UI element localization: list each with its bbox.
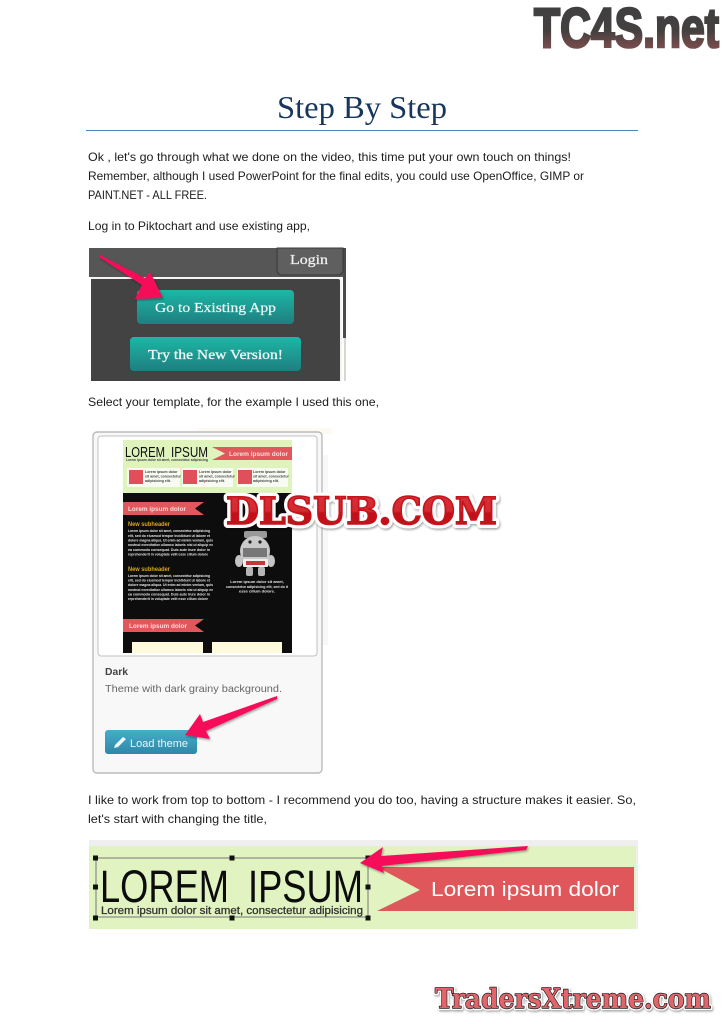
template thumbnail: Lorem ipsum dolor sit amet, consectetur adipisicing <box>128 528 210 533</box>
selected title text box <box>93 856 370 920</box>
template thumbnail: Lorem ipsum dolor sit amet, consectetur adipisicing <box>126 458 208 462</box>
template thumbnail: Lorem ipsum dolor sit amet, <box>230 579 284 584</box>
template thumbnail: esse cillum dolore. <box>239 588 275 594</box>
button: Go to Existing App: Go to Existing App <box>155 300 276 315</box>
template thumbnail: elit, sed do eiusmod tempor incididunt ut labore et <box>128 578 211 582</box>
title: Step By Step <box>277 89 447 125</box>
selected title text box: LOREM <box>100 861 229 912</box>
template thumbnail: ea commodo consequat. Duis aute irure dolor in <box>128 547 210 552</box>
template thumbnail: IPSUM <box>171 444 208 461</box>
selected title text box: IPSUM <box>248 861 363 912</box>
text: theme name: Dark <box>105 667 128 678</box>
template thumbnail: sit amet, consectetur <box>199 474 236 478</box>
text: top to bottom advice: let's start with changing the title, <box>88 812 267 826</box>
arrow: pink to load theme <box>185 696 277 739</box>
template thumbnail: elit, sed do eiusmod tempor incididunt ut labore et <box>128 533 211 538</box>
template thumbnail: sit amet, consectetur <box>145 474 182 478</box>
watermark: DLSUB.COM: DLSUB.COM <box>226 489 497 533</box>
template thumbnail: nostrud exercitation ullamco laboris nisi ut aliquip ex <box>128 587 214 592</box>
template thumbnail: adipisicing elit. <box>199 479 225 483</box>
template thumbnail: New subheader <box>128 566 170 573</box>
template thumbnail: nostrud exercitation ullamco laboris nisi ut aliquip ex <box>128 542 214 547</box>
button: Go to Existing App <box>137 290 294 324</box>
template thumbnail: LOREM <box>125 444 165 461</box>
text: log in instruction: Log in to Piktochart and use existing app, <box>88 219 310 233</box>
ribbon: Lorem ipsum dolor: Lorem ipsum dolor <box>431 879 619 901</box>
screenshot: Piktochart login panel: Login <box>290 252 328 267</box>
selected title text box: Lorem ipsum dolor sit amet, consectetur adipisicing <box>101 905 363 917</box>
watermark: DLSUB.COM: DLSUB.COM <box>226 489 497 533</box>
template thumbnail: adipisicing elit. <box>145 479 171 483</box>
template thumbnail: ea commodo consequat. Duis aute irure dolor in <box>128 592 210 596</box>
screenshot: title editing banner <box>89 840 638 929</box>
template thumbnail: Lorem ipsum dolor <box>199 470 232 474</box>
template thumbnail: Lorem ipsum dolor <box>145 470 178 474</box>
template thumbnail: Lorem ipsum dolor <box>129 623 187 630</box>
intro text block: Remember, although I used PowerPoint for the final edits, you could use OpenOffice, GIMP or <box>88 169 584 183</box>
template thumbnail: Lorem ipsum dolor <box>253 470 286 474</box>
text: theme description: Theme with dark grainy background. <box>105 683 282 695</box>
template thumbnail: reprehenderit in voluptate velit esse cillum dolore <box>128 552 209 556</box>
template thumbnail: Lorem ipsum dolor <box>128 506 186 513</box>
template thumbnail: dolore magna aliqua. Ut enim ad minim veniam, quis <box>128 538 214 542</box>
text: select template: Select your template, for the example I used this one, <box>88 395 379 409</box>
template thumbnail: adipisicing elit. <box>253 479 279 483</box>
template thumbnail: New subheader <box>128 521 170 528</box>
ribbon: Lorem ipsum dolor <box>377 867 634 911</box>
text: top to bottom advice <box>88 793 636 826</box>
button: Try the New Version: Try the New Version! <box>148 347 283 362</box>
template thumbnail: Lorem ipsum dolor sit amet, consectetur adipisicing <box>128 573 210 578</box>
screenshot: Piktochart login panel <box>89 248 346 381</box>
button: load theme: Load theme <box>130 738 188 750</box>
arrow: pink to existing app <box>99 255 163 299</box>
template thumbnail: dolore magna aliqua. Ut enim ad minim veniam, quis <box>128 582 214 587</box>
template thumbnail: consectetur adipisicing elit, sed do it <box>226 584 289 589</box>
icon: robot mascot <box>235 531 275 576</box>
screenshot: template card <box>93 428 332 773</box>
intro text block <box>88 150 584 202</box>
button: load theme <box>105 730 197 754</box>
arrow: pink to title <box>360 846 528 873</box>
button: Try the New Version <box>130 337 301 371</box>
template thumbnail: Lorem ipsum dolor <box>229 451 288 458</box>
template thumbnail <box>123 440 292 653</box>
intro text block: PAINT.NET - ALL FREE. <box>88 188 207 202</box>
template thumbnail: sit amet, consectetur <box>253 474 290 478</box>
template thumbnail: reprehenderit in voluptate velit esse cillum dolore <box>128 596 209 601</box>
intro text block: Ok , let's go through what we done on the video, this time put your own touch on things! <box>88 150 571 164</box>
text: top to bottom advice: I like to work from top to bottom - I recommend you do too, having a structure makes it easier. So, <box>88 793 636 807</box>
